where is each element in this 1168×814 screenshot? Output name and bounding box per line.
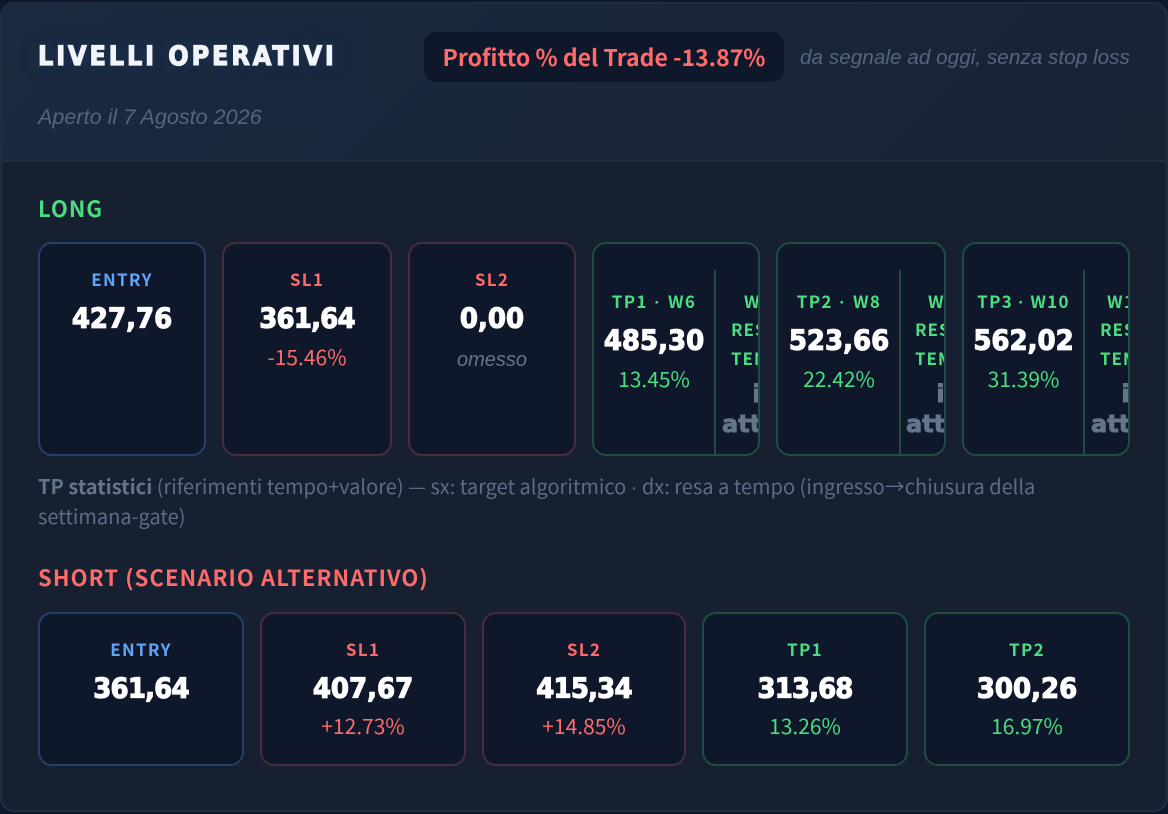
TP note [38, 471, 1035, 530]
card: long SL1: 361,64 [259, 303, 355, 335]
card: TP3: 31.39% [988, 364, 1059, 394]
card: long SL2 [408, 242, 576, 456]
card: short entry: 361,64 [93, 673, 189, 705]
heading: long: LONG [38, 192, 103, 224]
card: long SL1: SL1 [290, 266, 324, 291]
card: short TP1: TP1 [787, 636, 823, 661]
card: TP3: 562,02 [973, 325, 1074, 357]
header band [2, 4, 1166, 162]
card: short SL2: SL2 [567, 636, 601, 661]
card: long SL2: omesso [457, 349, 527, 371]
card: long SL2: SL2 [475, 266, 509, 291]
card: short entry: ENTRY [110, 636, 172, 661]
opening date: Aperto il 7 Agosto 2026 [38, 104, 262, 129]
card: short SL2 [482, 612, 686, 766]
title: LIVELLI OPERATIVI [38, 40, 337, 72]
TP note: settimana-gate) [38, 501, 186, 530]
card: TP2 [776, 242, 946, 456]
heading: short: SHORT (SCENARIO ALTERNATIVO) [38, 561, 429, 593]
card: long entry: ENTRY [91, 266, 153, 291]
card: short SL1: SL1 [346, 636, 380, 661]
card: short SL1: +12.73% [321, 711, 405, 741]
card: TP1: 485,30 [604, 325, 704, 357]
card: TP3: TP3 · W10 [977, 288, 1070, 313]
card: short SL1 [260, 612, 466, 766]
badge note: da segnale ad oggi, senza stop loss [800, 46, 1130, 69]
card: TP2: 22.42% [803, 364, 875, 394]
card: short TP2: 16.97% [991, 711, 1063, 741]
card: TP1: 13.45% [618, 364, 690, 394]
profit badge: Profitto % del Trade -13.87% [443, 39, 765, 73]
card: short entry [38, 612, 244, 766]
card: long SL1: -15.46% [267, 342, 347, 372]
card: short TP1: 313,68 [758, 673, 852, 705]
card: short SL2: +14.85% [542, 711, 626, 741]
card: TP1 [592, 242, 760, 456]
card: short TP2 [924, 612, 1130, 766]
card: long SL1 [222, 242, 392, 456]
card: TP1: TP1 · W6 [612, 288, 696, 313]
card: short TP1 [702, 612, 908, 766]
card: short TP2: TP2 [1009, 636, 1045, 661]
card: long SL2: 0,00 [460, 303, 524, 335]
TP note: TP statistici (riferimenti tempo+valore) — sx: target algoritmico · dx: resa a tempo (ingresso→chiusura della [38, 471, 1035, 500]
card: short SL1: 407,67 [313, 673, 413, 705]
card: short TP2: 300,26 [977, 673, 1077, 705]
profit badge [424, 32, 784, 82]
card: TP2: TP2 · W8 [797, 288, 881, 313]
card: short TP1: 13.26% [769, 711, 841, 741]
card: short SL2: 415,34 [536, 673, 632, 705]
card: long entry [38, 242, 206, 456]
card: TP3 [962, 242, 1130, 456]
card: TP2: 523,66 [789, 325, 889, 357]
card: long entry: 427,76 [72, 303, 172, 335]
